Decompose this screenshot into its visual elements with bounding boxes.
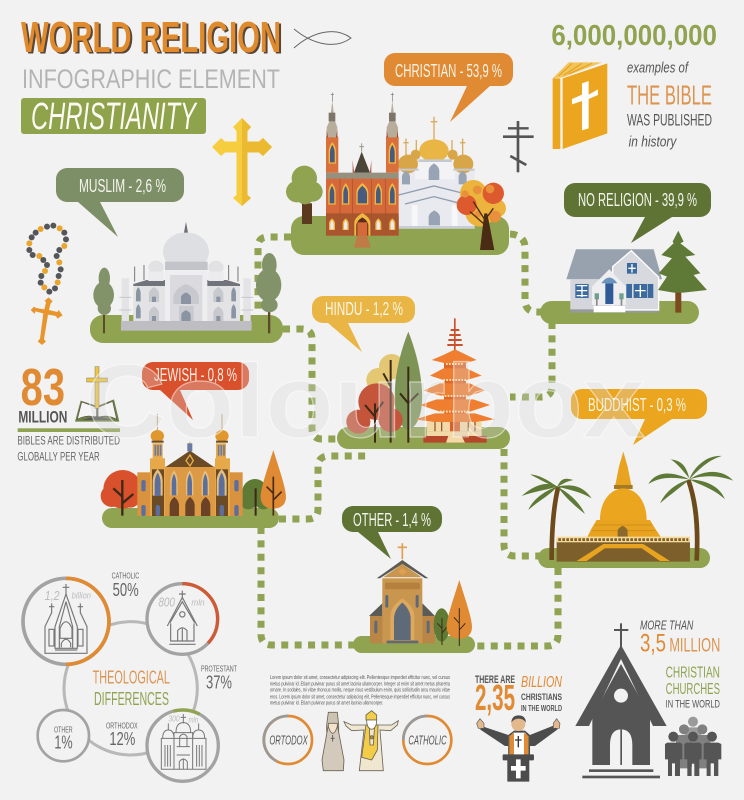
lorem text: ornare. In sodales, mi vitae rhoncus mollis, neque risus vestibulum enim, quis sollicitudin arcu mauris vitae <box>270 688 450 694</box>
churches text: 3,5 <box>640 631 666 658</box>
muslim mosque <box>93 222 281 333</box>
panel: 2,35 billion <box>475 674 563 782</box>
muslim bubble <box>56 168 184 237</box>
christian platform <box>291 216 509 255</box>
buddhist stupa and palms <box>522 452 733 562</box>
million label: MILLION <box>18 408 67 426</box>
christians in the world: CHRISTIANS <box>521 692 562 703</box>
bible count: 6,000,000,000 <box>551 20 717 52</box>
theological heading: DIFFERENCES <box>94 688 169 709</box>
2,35 figure: 2,35 <box>475 677 515 718</box>
panel: 3,5 million churches <box>575 617 721 778</box>
heading: christianity <box>21 96 206 138</box>
icon: preacher <box>477 715 560 782</box>
ortodox ring <box>264 716 312 764</box>
orthodox label <box>106 720 138 749</box>
title: WORLD RELIGION <box>21 13 281 62</box>
hindu bubble: HINDU - 1,2 % <box>325 298 403 319</box>
theological heading: THEOLOGICAL <box>93 666 170 687</box>
catholic label <box>112 570 139 600</box>
ortodox ring: ORTODOX <box>269 733 308 747</box>
panel: other <box>342 506 475 653</box>
icon: gold cross <box>212 118 272 206</box>
panel: ortodox vs catholic <box>264 675 451 771</box>
panel: hindu <box>312 296 510 449</box>
protestant ring: 800 <box>158 596 175 610</box>
there are: THERE ARE <box>475 674 515 686</box>
subtitle: INFOGRAPHIC ELEMENT <box>22 64 280 94</box>
icon: people group <box>665 717 721 776</box>
catholic label: 50% <box>113 579 139 600</box>
bible text: in history <box>629 135 678 151</box>
hindu pagoda and trees <box>346 318 495 443</box>
lorem text <box>270 675 450 707</box>
catholic label: CATHOLIC <box>112 570 139 580</box>
orthodox ring <box>139 702 226 789</box>
no religion bubble <box>564 183 711 243</box>
protestant label: 37% <box>206 671 232 692</box>
churches text <box>640 617 720 710</box>
muslim platform <box>90 315 283 343</box>
bibles text <box>17 433 120 464</box>
catholic ring <box>23 578 109 664</box>
catholic ring: billion <box>72 591 91 601</box>
churches text: IN THE WORLD <box>666 698 720 710</box>
icon: bible book <box>553 62 607 149</box>
dotted connector paths <box>258 234 558 646</box>
bibles text: GLOBALLY PER YEAR <box>17 450 100 464</box>
catholic ring: 1,2 <box>45 588 60 603</box>
panel: no religion <box>540 183 711 324</box>
muslim bubble: MUSLIM - 2,6 % <box>79 175 166 196</box>
other church <box>369 543 472 646</box>
no religion house <box>566 231 707 313</box>
watermark: Colourbox <box>85 344 645 460</box>
heading: christianity: CHRISTIANITY <box>31 96 198 138</box>
catholic ring <box>403 716 451 764</box>
christians in the world <box>521 692 562 713</box>
icon: rosary <box>26 223 69 345</box>
other platform <box>353 636 475 653</box>
title <box>21 13 283 64</box>
bible text: examples of <box>627 60 689 76</box>
bible text <box>627 60 712 151</box>
panel: bible stat <box>551 20 717 151</box>
panel: buddhist <box>522 389 733 568</box>
orthodox ring: 300 <box>168 715 180 724</box>
jewish platform <box>102 508 279 528</box>
orthodox priest figure <box>322 712 344 771</box>
christian bubble: CHRISTIAN - 53,9 % <box>395 60 502 81</box>
christian churches <box>286 93 506 250</box>
other bubble: OTHER - 1,4 % <box>353 509 431 530</box>
buddhist platform <box>538 548 710 568</box>
other bubble <box>342 506 442 559</box>
title: WORLD RELIGION <box>23 14 283 64</box>
panel: jewish <box>101 362 286 528</box>
churches text: MORE THAN <box>640 617 694 632</box>
icon: orthodox cross <box>503 121 534 172</box>
83 figure: 83 <box>21 359 65 417</box>
jewish bubble: JEWISH - 0,8 % <box>154 364 237 385</box>
no religion platform <box>540 301 699 324</box>
other ring <box>38 710 89 761</box>
buddhist bubble <box>571 389 707 445</box>
panel: 83 million <box>17 359 120 464</box>
christian bubble <box>384 53 513 122</box>
panel: theological differences <box>23 570 237 789</box>
protestant ring <box>147 584 218 654</box>
other ring: 1% <box>54 731 73 752</box>
bibles text: BIBLES ARE DISTRIBUTED <box>17 433 120 447</box>
panel: muslim <box>56 168 283 343</box>
hindu bubble <box>312 296 415 352</box>
jewish synagogue and trees <box>101 414 286 516</box>
icon: fish <box>294 29 351 48</box>
lorem text: eros. Lorem ipsum dolor sit amet, consectetur adipiscing elit. Pellentesque imperdiet efficitur nunc, vel cursus <box>270 694 450 700</box>
protestant label <box>201 664 237 692</box>
christians in the world: IN THE WORLD <box>521 703 562 713</box>
protestant label: PROTESTANT <box>201 664 237 674</box>
icon: book with cross <box>75 367 119 422</box>
hindu platform <box>337 427 510 449</box>
other ring: OTHER <box>54 724 73 734</box>
orthodox label: ORTHODOX <box>106 720 138 730</box>
lorem text: metus pulvinar id. Etiam pulvinar purus sit amet lacinia ullamcorper. <box>270 701 383 707</box>
theological heading <box>93 666 170 709</box>
buddhist bubble: BUDDHIST - 0,3 % <box>588 394 686 415</box>
catholic priest figure <box>344 711 398 771</box>
protestant ring: mln <box>191 598 205 608</box>
lorem text: Lorem ipsum dolor sit amet, consectetur adipiscing elit. Pellentesque imperdiet efficitur nunc, vel cursus <box>270 675 450 681</box>
billion: BILLION <box>521 674 563 691</box>
icon: church <box>575 623 667 778</box>
catholic ring: CATHOLIC <box>408 733 447 747</box>
panel: christian <box>286 53 513 255</box>
lorem text: metus pulvinar id. Etiam pulvinar purus sit amet lacinia ullamcorper. Integer ut enim sit amet metus pharetra <box>270 681 450 687</box>
orthodox label: 12% <box>109 728 135 749</box>
jewish bubble <box>142 362 249 420</box>
orthodox ring: mln <box>188 715 199 724</box>
